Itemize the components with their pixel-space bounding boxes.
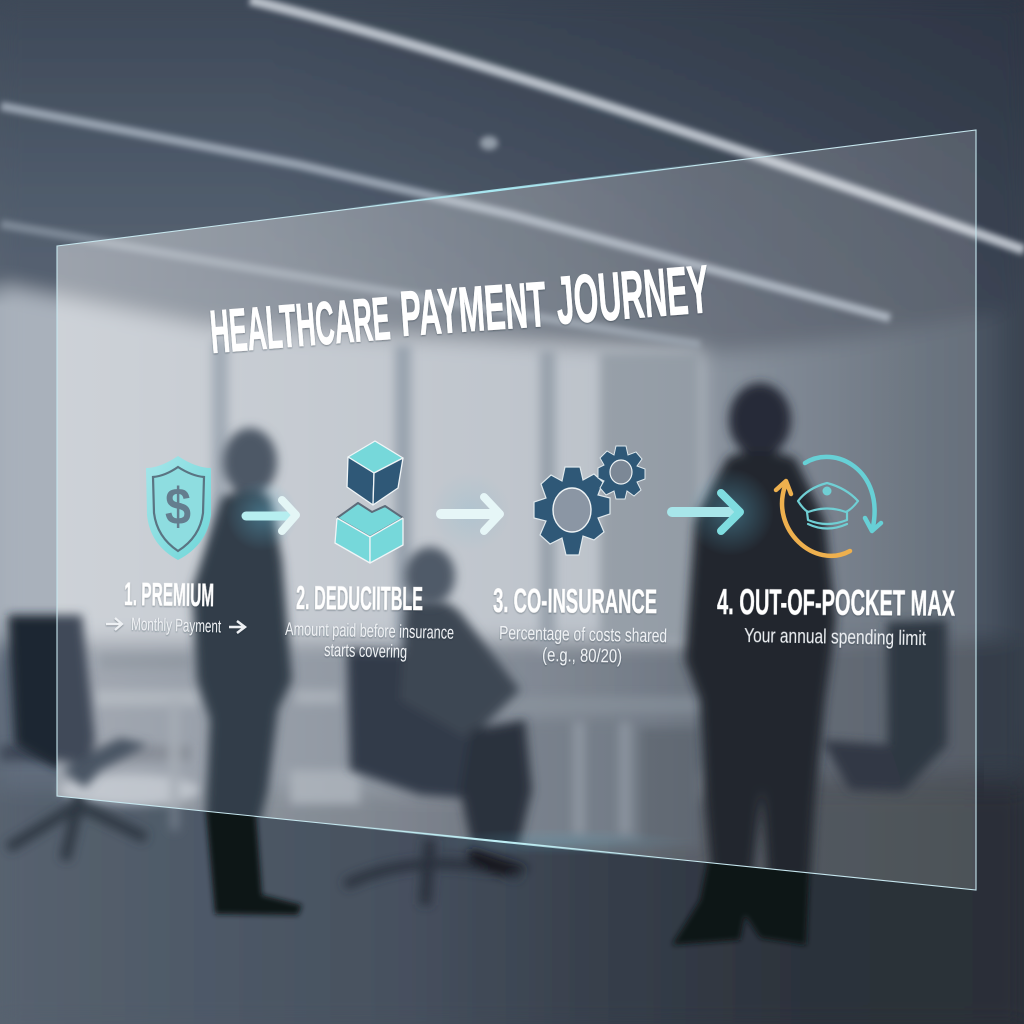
- text: co-insurance description: (e.g., 80/20): [542, 645, 622, 668]
- objects seen through the glass: [30, 383, 947, 880]
- step 4: out-of-pocket max: [717, 457, 955, 650]
- text: monthly payment: [106, 614, 245, 637]
- objects in front of the glass edge: [8, 615, 810, 945]
- icon: cycle with cap: [776, 457, 881, 556]
- panel edges: [57, 130, 976, 890]
- step 1: premium: 1. PREMIUM: [124, 576, 214, 613]
- text: deductible description: [285, 618, 454, 662]
- text: deductible description: starts covering: [324, 639, 407, 662]
- step 1: premium: [106, 456, 245, 637]
- step 3: co-insurance: [493, 446, 667, 668]
- step 2: deductible: 2. DEDUCIITBLE: [296, 579, 423, 617]
- arrow: premium to deductible: [226, 479, 298, 551]
- title: HEALTHCARE: [208, 284, 392, 366]
- text: monthly payment: Monthly Payment: [131, 614, 221, 637]
- text: out-of-pocket description: Your annual spending limit: [744, 625, 927, 650]
- text: co-insurance description: [499, 623, 667, 668]
- icon: stacked cubes: [335, 441, 403, 563]
- icon: shield with dollar: $: [165, 478, 191, 536]
- ceiling light strips: [1, 0, 1024, 345]
- step 2: deductible: [285, 441, 454, 662]
- icon: shield with dollar: [146, 456, 211, 560]
- heading: co-insurance: 3. CO-INSURANCE: [493, 582, 657, 621]
- icon: gears: [534, 446, 645, 555]
- text: co-insurance description: Percentage of costs shared: [499, 623, 667, 647]
- text: JOURNEY: [553, 251, 712, 339]
- arrow: co-insurance to out-of-pocket max: [672, 468, 774, 556]
- arrow: deductible to co-insurance: [430, 472, 510, 552]
- title: PAYMENT: [398, 268, 549, 350]
- text: deductible description: Amount paid before insurance: [285, 618, 454, 643]
- glass panel: [57, 130, 976, 890]
